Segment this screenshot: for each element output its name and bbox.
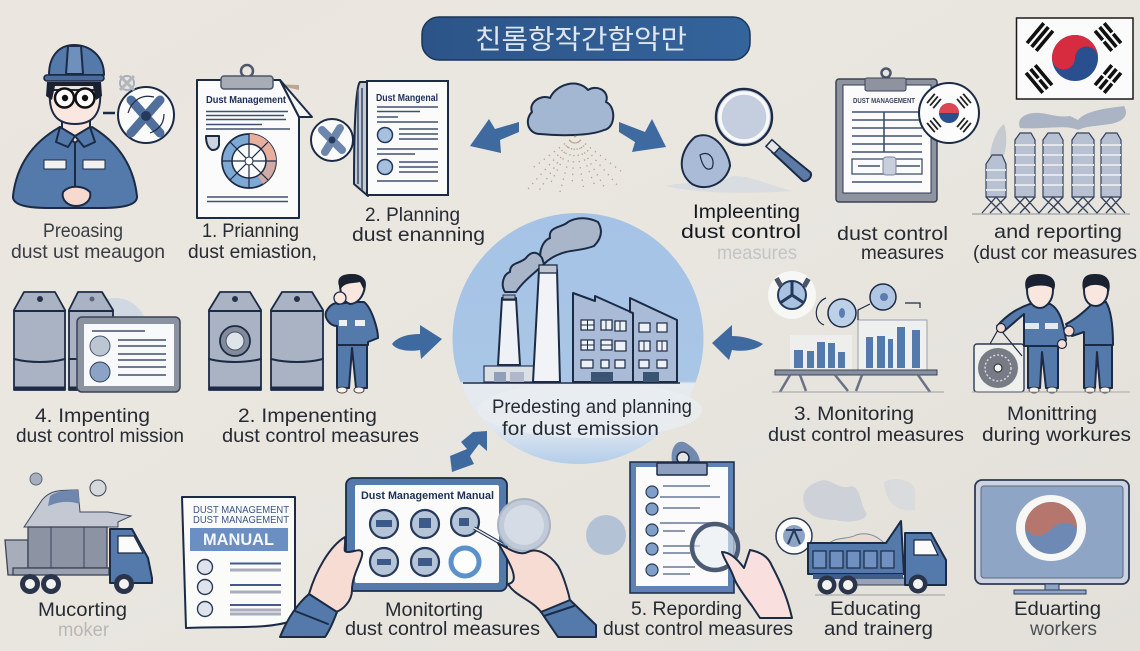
label: and reporting: (dust cor measures	[973, 242, 1137, 264]
title banner	[422, 17, 750, 60]
label: educating workers: workers	[1029, 618, 1097, 640]
icon: worker right	[1058, 274, 1113, 393]
bar chart	[794, 327, 920, 368]
label: step 1 planning: dust emiastion,	[188, 241, 317, 263]
label: implementing: Impleenting	[693, 201, 800, 223]
label: preparing: dust ust meaugon	[11, 241, 165, 263]
label: mucorting: Mucorting	[38, 599, 127, 621]
label: mucorting: moker	[58, 619, 109, 641]
panel: monitoring charts on table	[768, 271, 944, 392]
icon: tablet	[77, 317, 180, 392]
label: monitoring during work: Monittring	[1007, 403, 1097, 425]
icon: worker covering face	[326, 274, 378, 393]
panel: dust management manual sheet	[182, 497, 295, 628]
label: preparing	[11, 220, 165, 263]
panel: row of smokestacks	[972, 106, 1130, 214]
icon: worker figure	[13, 45, 137, 208]
icon: fan badge	[118, 76, 174, 143]
label: educating and training	[824, 598, 933, 640]
icon: hand	[722, 550, 792, 618]
label: preparing: Preoasing	[43, 220, 123, 242]
panel: central factory hub	[452, 213, 704, 464]
icon: emblem	[1016, 495, 1086, 561]
load debris	[24, 473, 131, 527]
label: educating and training: Educating	[830, 598, 921, 620]
icon: fan badge small	[311, 119, 353, 161]
label: dust control measures: dust control	[837, 223, 948, 245]
label: monitoring: Monitorting	[385, 599, 483, 621]
panel: worker in helmet	[13, 45, 174, 208]
arrow: double diagonal	[450, 431, 487, 472]
icon: right hand and sleeve	[474, 528, 596, 637]
label: dust control measures: measures	[861, 242, 944, 264]
icon: small chimney	[498, 295, 520, 365]
panel: dust manual booklet	[354, 81, 448, 196]
dust cloud	[803, 479, 915, 522]
icon: grey circle	[586, 515, 626, 555]
label: monitoring during work: during workures	[982, 424, 1131, 446]
hub caption: for dust emission	[502, 418, 659, 440]
panel: magnifier over rock	[665, 89, 811, 193]
icon: dust cloud with falling dust	[527, 84, 622, 192]
manual banner: MANUAL	[203, 530, 274, 549]
icon: fan box	[974, 328, 1024, 392]
label: monitoring	[345, 599, 540, 640]
panel: clipboard with magnifier hand	[586, 442, 792, 618]
panel: loaded truck	[5, 473, 152, 594]
label: step 3 monitoring: 3. Monitoring	[794, 403, 914, 425]
arrow: to hub from left	[392, 325, 442, 359]
panel: clipboard dust management: Dust Management	[206, 94, 286, 106]
hub caption: Predesting and planning	[492, 396, 692, 418]
label: step 4 implementing: dust control mission	[16, 425, 184, 447]
panel: dust manual booklet: Dust Mangenal	[376, 93, 438, 104]
icon: flag badge	[919, 83, 979, 143]
icon: fan badge	[768, 271, 816, 319]
icon: smoke clouds	[503, 218, 601, 292]
label: mucorting	[38, 599, 127, 641]
panel: two workers with fan	[972, 274, 1130, 393]
icon: disc	[498, 499, 550, 551]
panel: dust management manual sheet: DUST MANAGEMENT	[193, 505, 289, 516]
label: and reporting: and reporting	[994, 221, 1122, 243]
label: step 1 planning	[188, 220, 317, 263]
label: educating workers: Eduarting	[1014, 598, 1101, 620]
panel: tanks with tablet	[14, 292, 180, 392]
icon: factory building	[463, 293, 680, 383]
label: step 5 reporting: 5. Repording	[631, 598, 742, 620]
label: step 2 planning: 2. Planning	[365, 204, 460, 226]
label: step 4 implementing: 4. Impenting	[35, 405, 150, 427]
panel: tablet with hands: Dust Management Manual	[361, 490, 494, 502]
label: step 5 reporting	[603, 598, 793, 640]
label: step 4 implementing	[16, 405, 184, 447]
label: implementing	[681, 201, 801, 264]
label: step 2 implementing: dust control measures	[222, 425, 419, 447]
label: implementing: dust control	[681, 221, 801, 243]
icon: Korean flag	[1016, 18, 1133, 99]
label: step 1 planning: 1. Prianning	[202, 220, 299, 242]
chart: circular wheel	[222, 134, 276, 188]
label: monitoring: dust control measures	[345, 618, 540, 640]
label: step 2 implementing	[222, 405, 419, 447]
panel: tablet with hands	[280, 478, 596, 637]
icon: tank dial	[220, 326, 250, 356]
icon: dust badge	[776, 518, 812, 554]
label: monitoring during work	[982, 403, 1131, 446]
panel: monitor with emblem	[975, 480, 1129, 594]
panel: clipboard dust management	[197, 65, 312, 218]
arrow: from cloud to right	[619, 119, 666, 152]
label: step 5 reporting: dust control measures	[603, 618, 793, 640]
title banner: 친롬항작간함악만	[475, 25, 687, 55]
icon: magnifier	[692, 524, 738, 570]
panel: clipboard with flag badge	[836, 68, 979, 202]
label: step 3 monitoring: dust control measures	[768, 424, 964, 446]
arrow: from cloud to left	[470, 119, 519, 153]
label: educating and training: and trainerg	[824, 618, 933, 640]
label: step 2 planning	[352, 204, 485, 246]
label: educating workers	[1014, 598, 1101, 640]
label: dust control measures	[837, 223, 948, 264]
label: implementing: measures	[717, 242, 797, 264]
low block	[484, 366, 534, 382]
label: step 3 monitoring	[768, 403, 964, 446]
arrow: to hub from right	[712, 325, 763, 360]
panel: dust management manual sheet: DUST MANAGEMENT	[193, 515, 289, 526]
panel: dump truck	[776, 479, 946, 595]
label: and reporting	[973, 221, 1137, 264]
hub caption	[492, 396, 692, 440]
panel: tanks with worker	[209, 274, 378, 393]
panel: clipboard with flag badge: DUST MANAGEMENT	[853, 96, 915, 105]
label: step 2 implementing: 2. Impenenting	[238, 405, 377, 427]
icon: sensor circles	[816, 284, 920, 327]
label: step 2 planning: dust enanning	[352, 224, 485, 246]
icon: worker left	[996, 274, 1066, 393]
icon: left hand and sleeve	[280, 537, 362, 637]
icon: tall chimney	[533, 265, 560, 382]
